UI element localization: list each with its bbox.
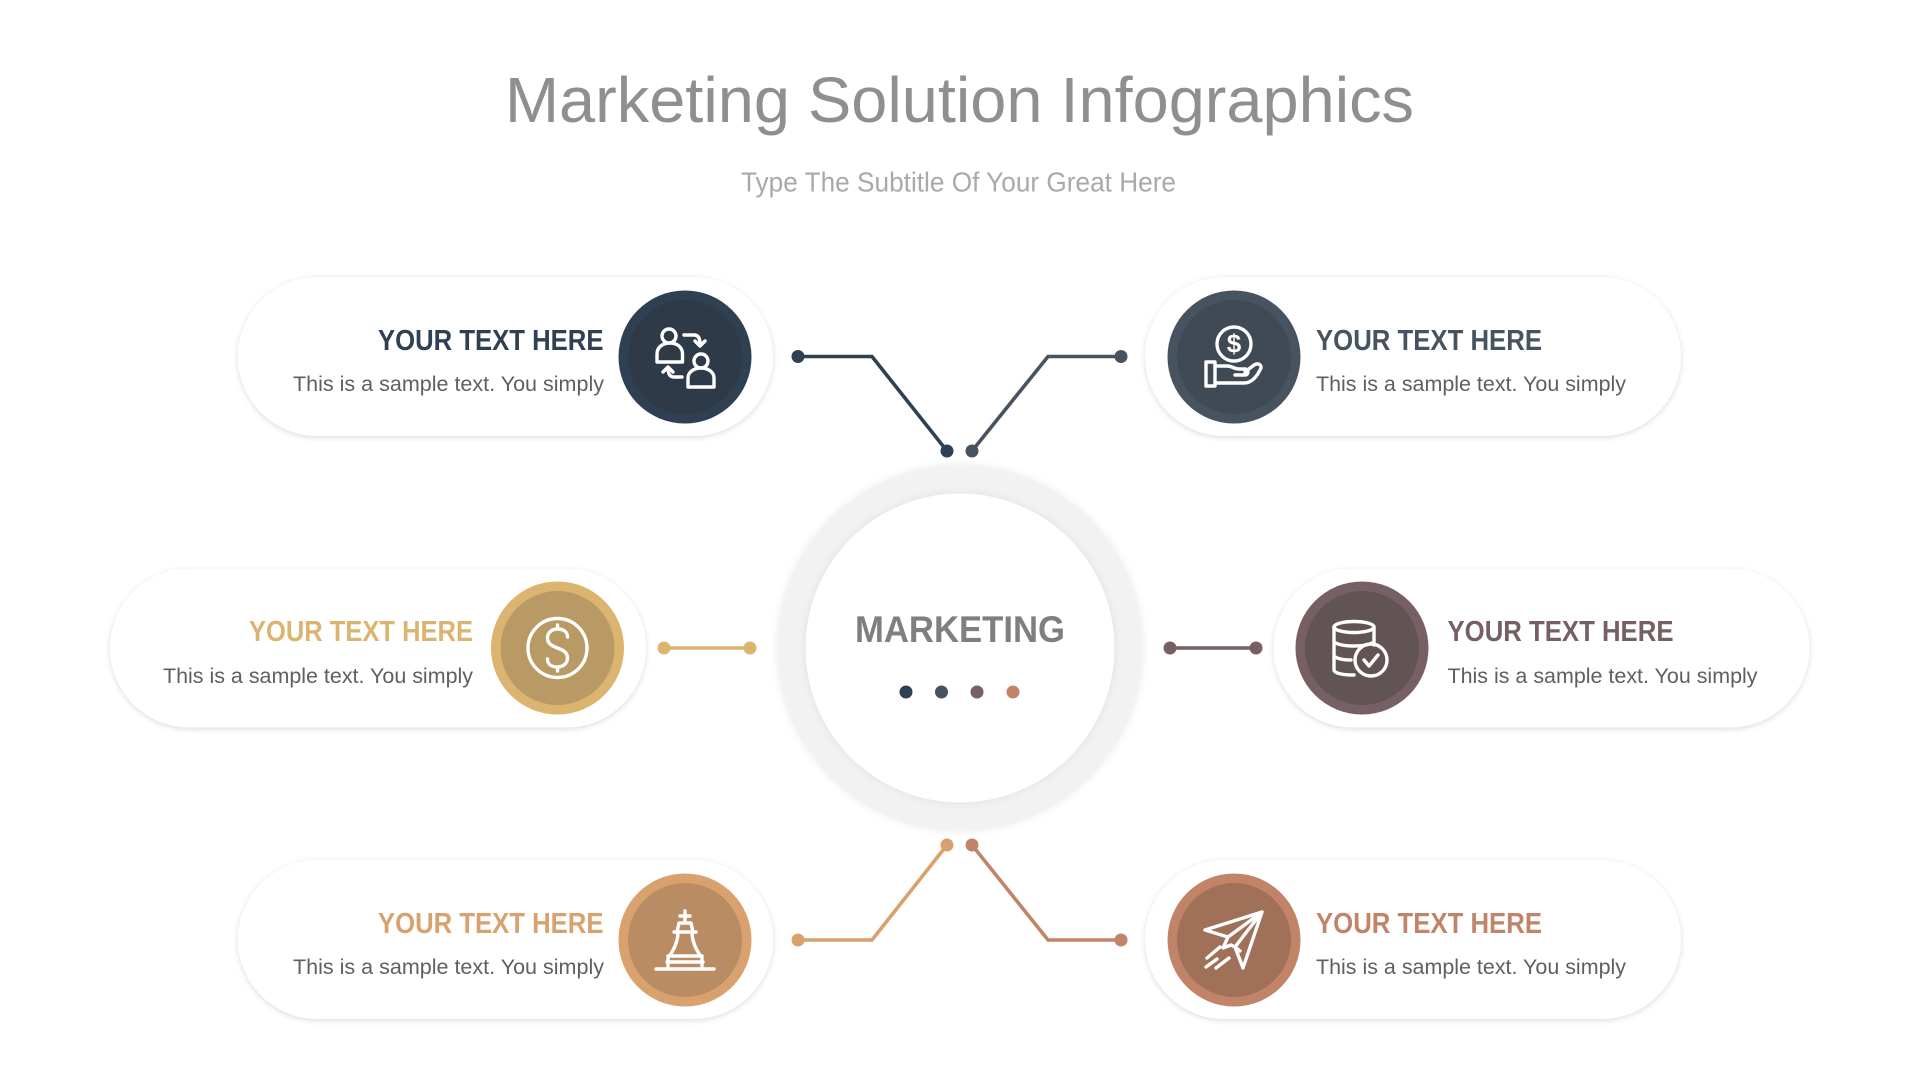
icon: hand holding coin: $ <box>1227 328 1242 358</box>
panel: top right <box>1145 277 1681 436</box>
heading: YOUR TEXT HERE <box>1316 908 1542 940</box>
icon: dollar circle <box>491 582 624 714</box>
connector: top left <box>792 350 954 458</box>
panel: middle right <box>1274 568 1810 728</box>
center colour dots <box>900 686 1020 698</box>
description: This is a sample text. You simply <box>1316 955 1626 979</box>
icon: database check <box>1296 582 1428 714</box>
title: Marketing Solution Infographics <box>505 64 1414 136</box>
description: This is a sample text. You simply <box>293 955 604 979</box>
panel: center marketing hub <box>777 465 1143 831</box>
connector: top right <box>966 350 1128 458</box>
description: This is a sample text. You simply <box>1448 664 1758 688</box>
heading: YOUR TEXT HERE <box>378 325 604 357</box>
subtitle: Type The Subtitle Of Your Great Here <box>741 166 1176 198</box>
panel: middle left <box>110 568 646 728</box>
icon: paper plane <box>1168 874 1300 1006</box>
connector: bottom left <box>792 838 954 946</box>
connector: bottom right <box>966 838 1128 946</box>
description: This is a sample text. You simply <box>163 664 473 688</box>
heading: YOUR TEXT HERE <box>1316 325 1542 357</box>
panel: top left <box>238 277 773 436</box>
description: This is a sample text. You simply <box>1316 372 1626 396</box>
connector: middle right <box>1164 642 1262 654</box>
description: This is a sample text. You simply <box>293 372 604 396</box>
center label: MARKETING <box>855 609 1065 650</box>
heading: YOUR TEXT HERE <box>249 616 473 648</box>
icon: hand holding coin <box>1168 290 1300 424</box>
icon: people exchange <box>618 290 752 424</box>
connector: middle left <box>658 642 756 654</box>
panel: bottom right <box>1145 860 1681 1019</box>
heading: YOUR TEXT HERE <box>1448 616 1674 648</box>
icon: chess king <box>618 874 752 1006</box>
panel: bottom left <box>238 860 773 1019</box>
heading: YOUR TEXT HERE <box>378 908 604 940</box>
